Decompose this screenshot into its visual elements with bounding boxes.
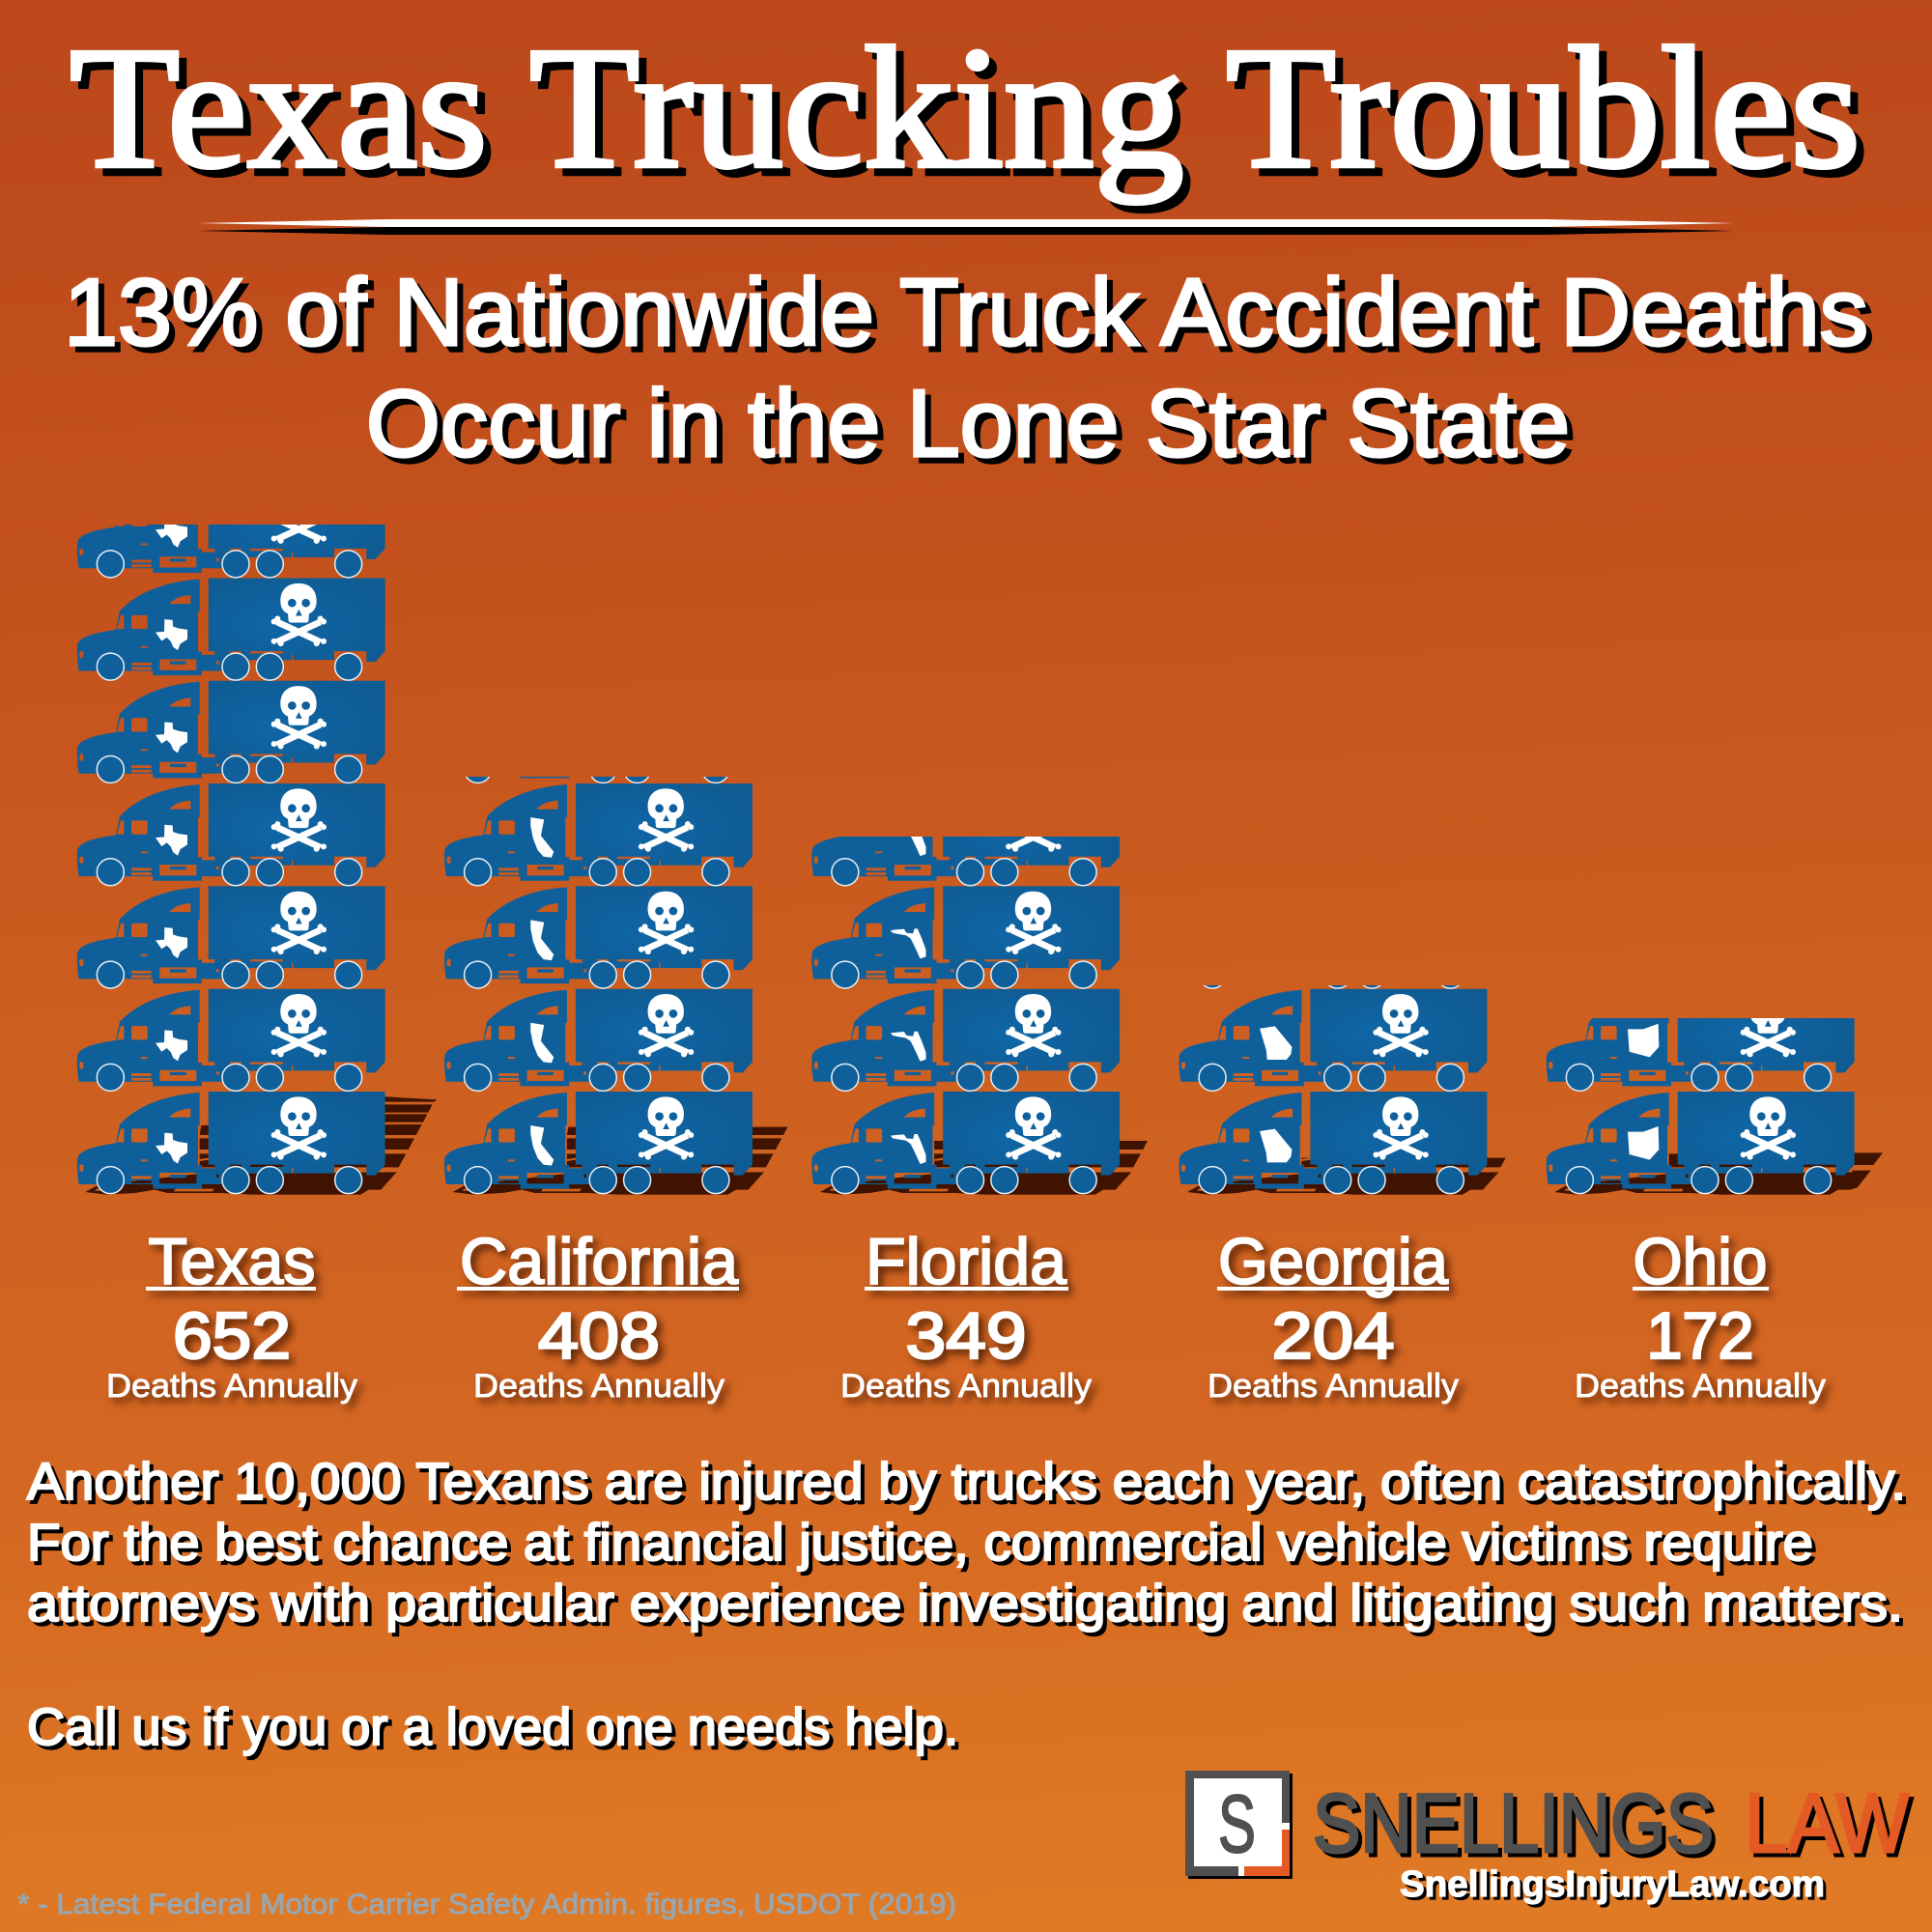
- label: Ohio: 172: [1646, 1299, 1754, 1373]
- label: California: Deaths Annually: [473, 1368, 724, 1405]
- subtitle: 13% of Nationwide Truck Accident Deaths: [64, 259, 1868, 365]
- truck chart: California stack: [444, 777, 788, 1195]
- label: Georgia: Deaths Annually: [1208, 1368, 1459, 1405]
- label: Georgia: Georgia: [1218, 1225, 1448, 1298]
- label: California: [457, 1225, 739, 1405]
- label: Georgia: 204: [1271, 1299, 1395, 1373]
- label: Georgia: [1208, 1225, 1459, 1405]
- body paragraph: [27, 1453, 1906, 1633]
- logo wordmark: SNELLINGS: [1313, 1777, 1714, 1870]
- title: Texas Trucking Troubles: [70, 12, 1861, 204]
- truck chart: Georgia stack: [1179, 985, 1506, 1195]
- label: Florida: Florida: [866, 1225, 1066, 1298]
- label: Ohio: Ohio: [1633, 1225, 1768, 1298]
- subtitle: Occur in the Lone Star State: [366, 370, 1570, 476]
- website url: SnellingsInjuryLaw.com: [1400, 1864, 1825, 1905]
- label: California: 408: [538, 1299, 660, 1373]
- body paragraph: attorneys with particular experience investigating and litigating such matters.: [27, 1575, 1903, 1633]
- truck chart: Florida stack: [811, 837, 1148, 1195]
- label: Texas: Deaths Annually: [106, 1368, 357, 1405]
- truck chart: Texas stack: [77, 475, 437, 1195]
- label: Ohio: [1575, 1225, 1826, 1405]
- logo wordmark: LAW: [1745, 1777, 1909, 1870]
- label: Florida: Deaths Annually: [840, 1368, 1092, 1405]
- body paragraph: For the best chance at financial justice, commercial vehicle victims require: [27, 1514, 1813, 1572]
- body paragraph: Another 10,000 Texans are injured by trucks each year, often catastrophically.: [27, 1453, 1906, 1511]
- logo: Snellings Law square mark: [1185, 1771, 1293, 1879]
- label: Texas: 652: [173, 1299, 291, 1373]
- label: Texas: [106, 1225, 357, 1405]
- label: Florida: [840, 1225, 1092, 1405]
- label: California: California: [460, 1225, 738, 1298]
- truck chart: Ohio stack: [1546, 1018, 1883, 1195]
- label: Ohio: Deaths Annually: [1575, 1368, 1826, 1405]
- label: Florida: 349: [906, 1299, 1026, 1373]
- subtitle: [64, 259, 1868, 476]
- label: Texas: Texas: [149, 1225, 315, 1298]
- footnote: * - Latest Federal Motor Carrier Safety Admin. figures, USDOT (2019): [17, 1889, 956, 1920]
- call to action: Call us if you or a loved one needs help.: [27, 1698, 958, 1756]
- title divider: [197, 219, 1734, 235]
- logo: Snellings Law square mark: S: [1218, 1778, 1256, 1869]
